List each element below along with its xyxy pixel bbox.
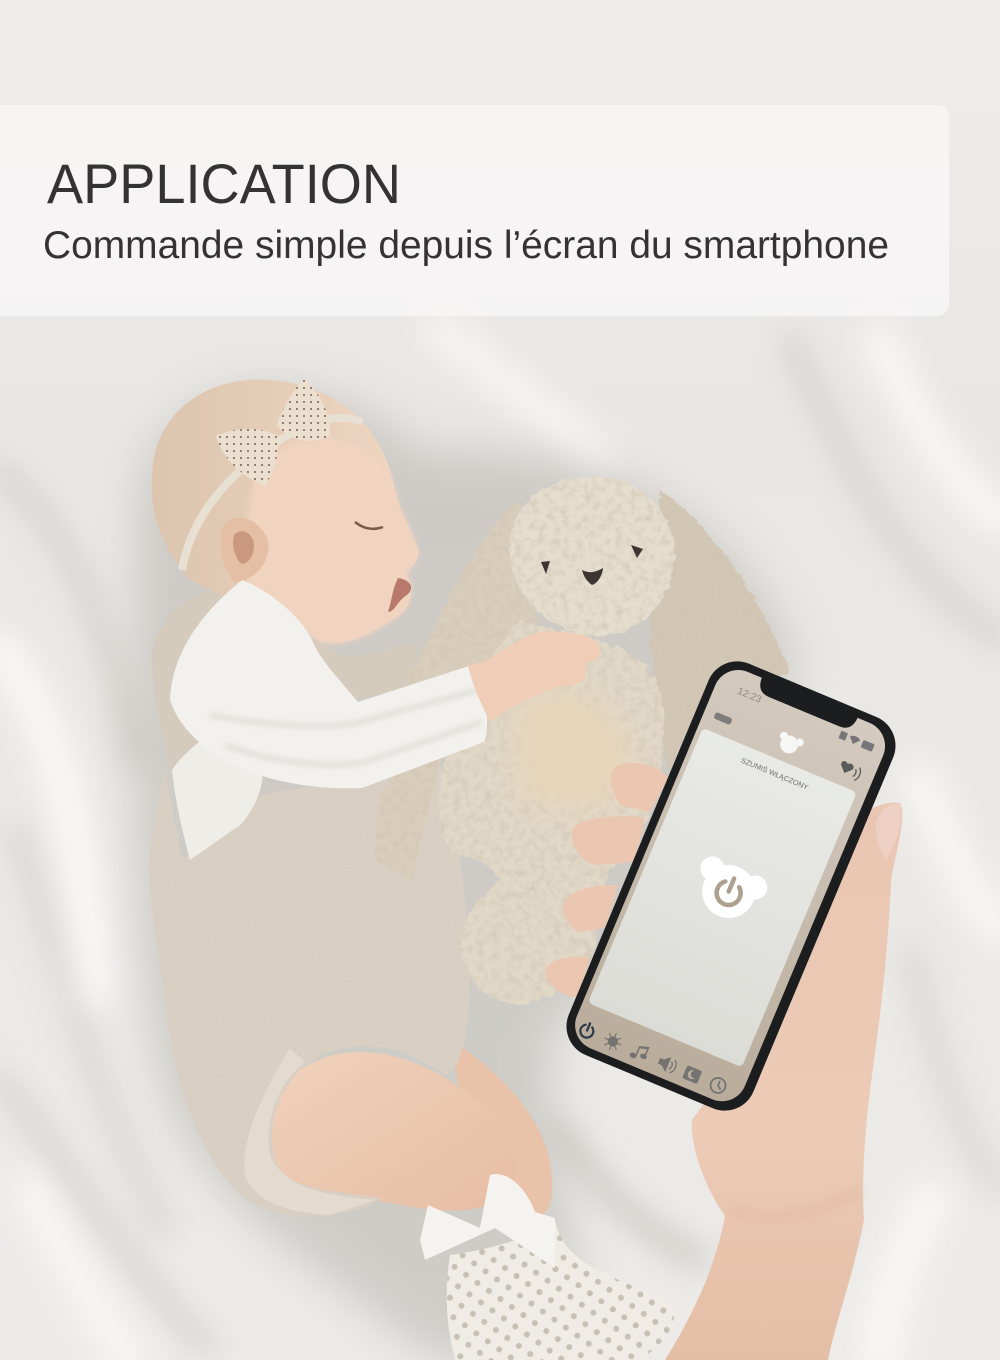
bow <box>216 378 330 486</box>
power icon <box>578 1021 596 1040</box>
clock icon <box>708 1076 728 1095</box>
thumb nail <box>876 804 901 859</box>
bunny plush <box>375 477 790 1004</box>
smartphone <box>557 652 905 1120</box>
phone body <box>557 652 905 1120</box>
adult hand <box>545 763 902 1360</box>
wrist shading <box>730 1190 860 1217</box>
knit top <box>152 585 418 770</box>
lips <box>388 578 411 612</box>
status label: SZUMIŚ WŁĄCZONY <box>740 756 810 792</box>
title: APPLICATION <box>47 152 401 215</box>
palm and wrist <box>665 803 902 1360</box>
ear <box>221 518 269 582</box>
status bar: 12:23 <box>736 686 763 706</box>
night icon <box>682 1065 702 1084</box>
baby hand on bunny <box>468 632 600 722</box>
fingers <box>545 763 668 998</box>
soft shadow around baby and bunny <box>134 389 793 1360</box>
bunny ears <box>375 490 790 880</box>
romper <box>150 765 470 1217</box>
sock <box>420 1174 674 1360</box>
header panel <box>0 105 949 316</box>
volume icon <box>656 1053 679 1075</box>
bottom navigation icons <box>578 1020 728 1097</box>
heart and sound icon <box>837 760 862 782</box>
baby legs <box>269 1042 552 1218</box>
ribbed vest <box>172 735 262 860</box>
power button bear <box>685 853 771 929</box>
headband <box>182 418 362 570</box>
closed eye <box>355 522 383 529</box>
notch <box>756 676 858 732</box>
sun icon <box>601 1030 625 1053</box>
baby sleeve <box>170 580 487 788</box>
music icon <box>629 1041 651 1063</box>
bunny head <box>510 477 675 636</box>
control panel <box>588 728 857 1067</box>
baby head <box>152 378 418 643</box>
status bar <box>713 681 876 780</box>
header bear logo <box>775 731 805 758</box>
bunny eyes and nose <box>541 545 643 585</box>
subtitle: Commande simple depuis l’écran du smartphone <box>43 224 889 267</box>
bunny body <box>438 620 664 1004</box>
baby <box>150 378 674 1360</box>
